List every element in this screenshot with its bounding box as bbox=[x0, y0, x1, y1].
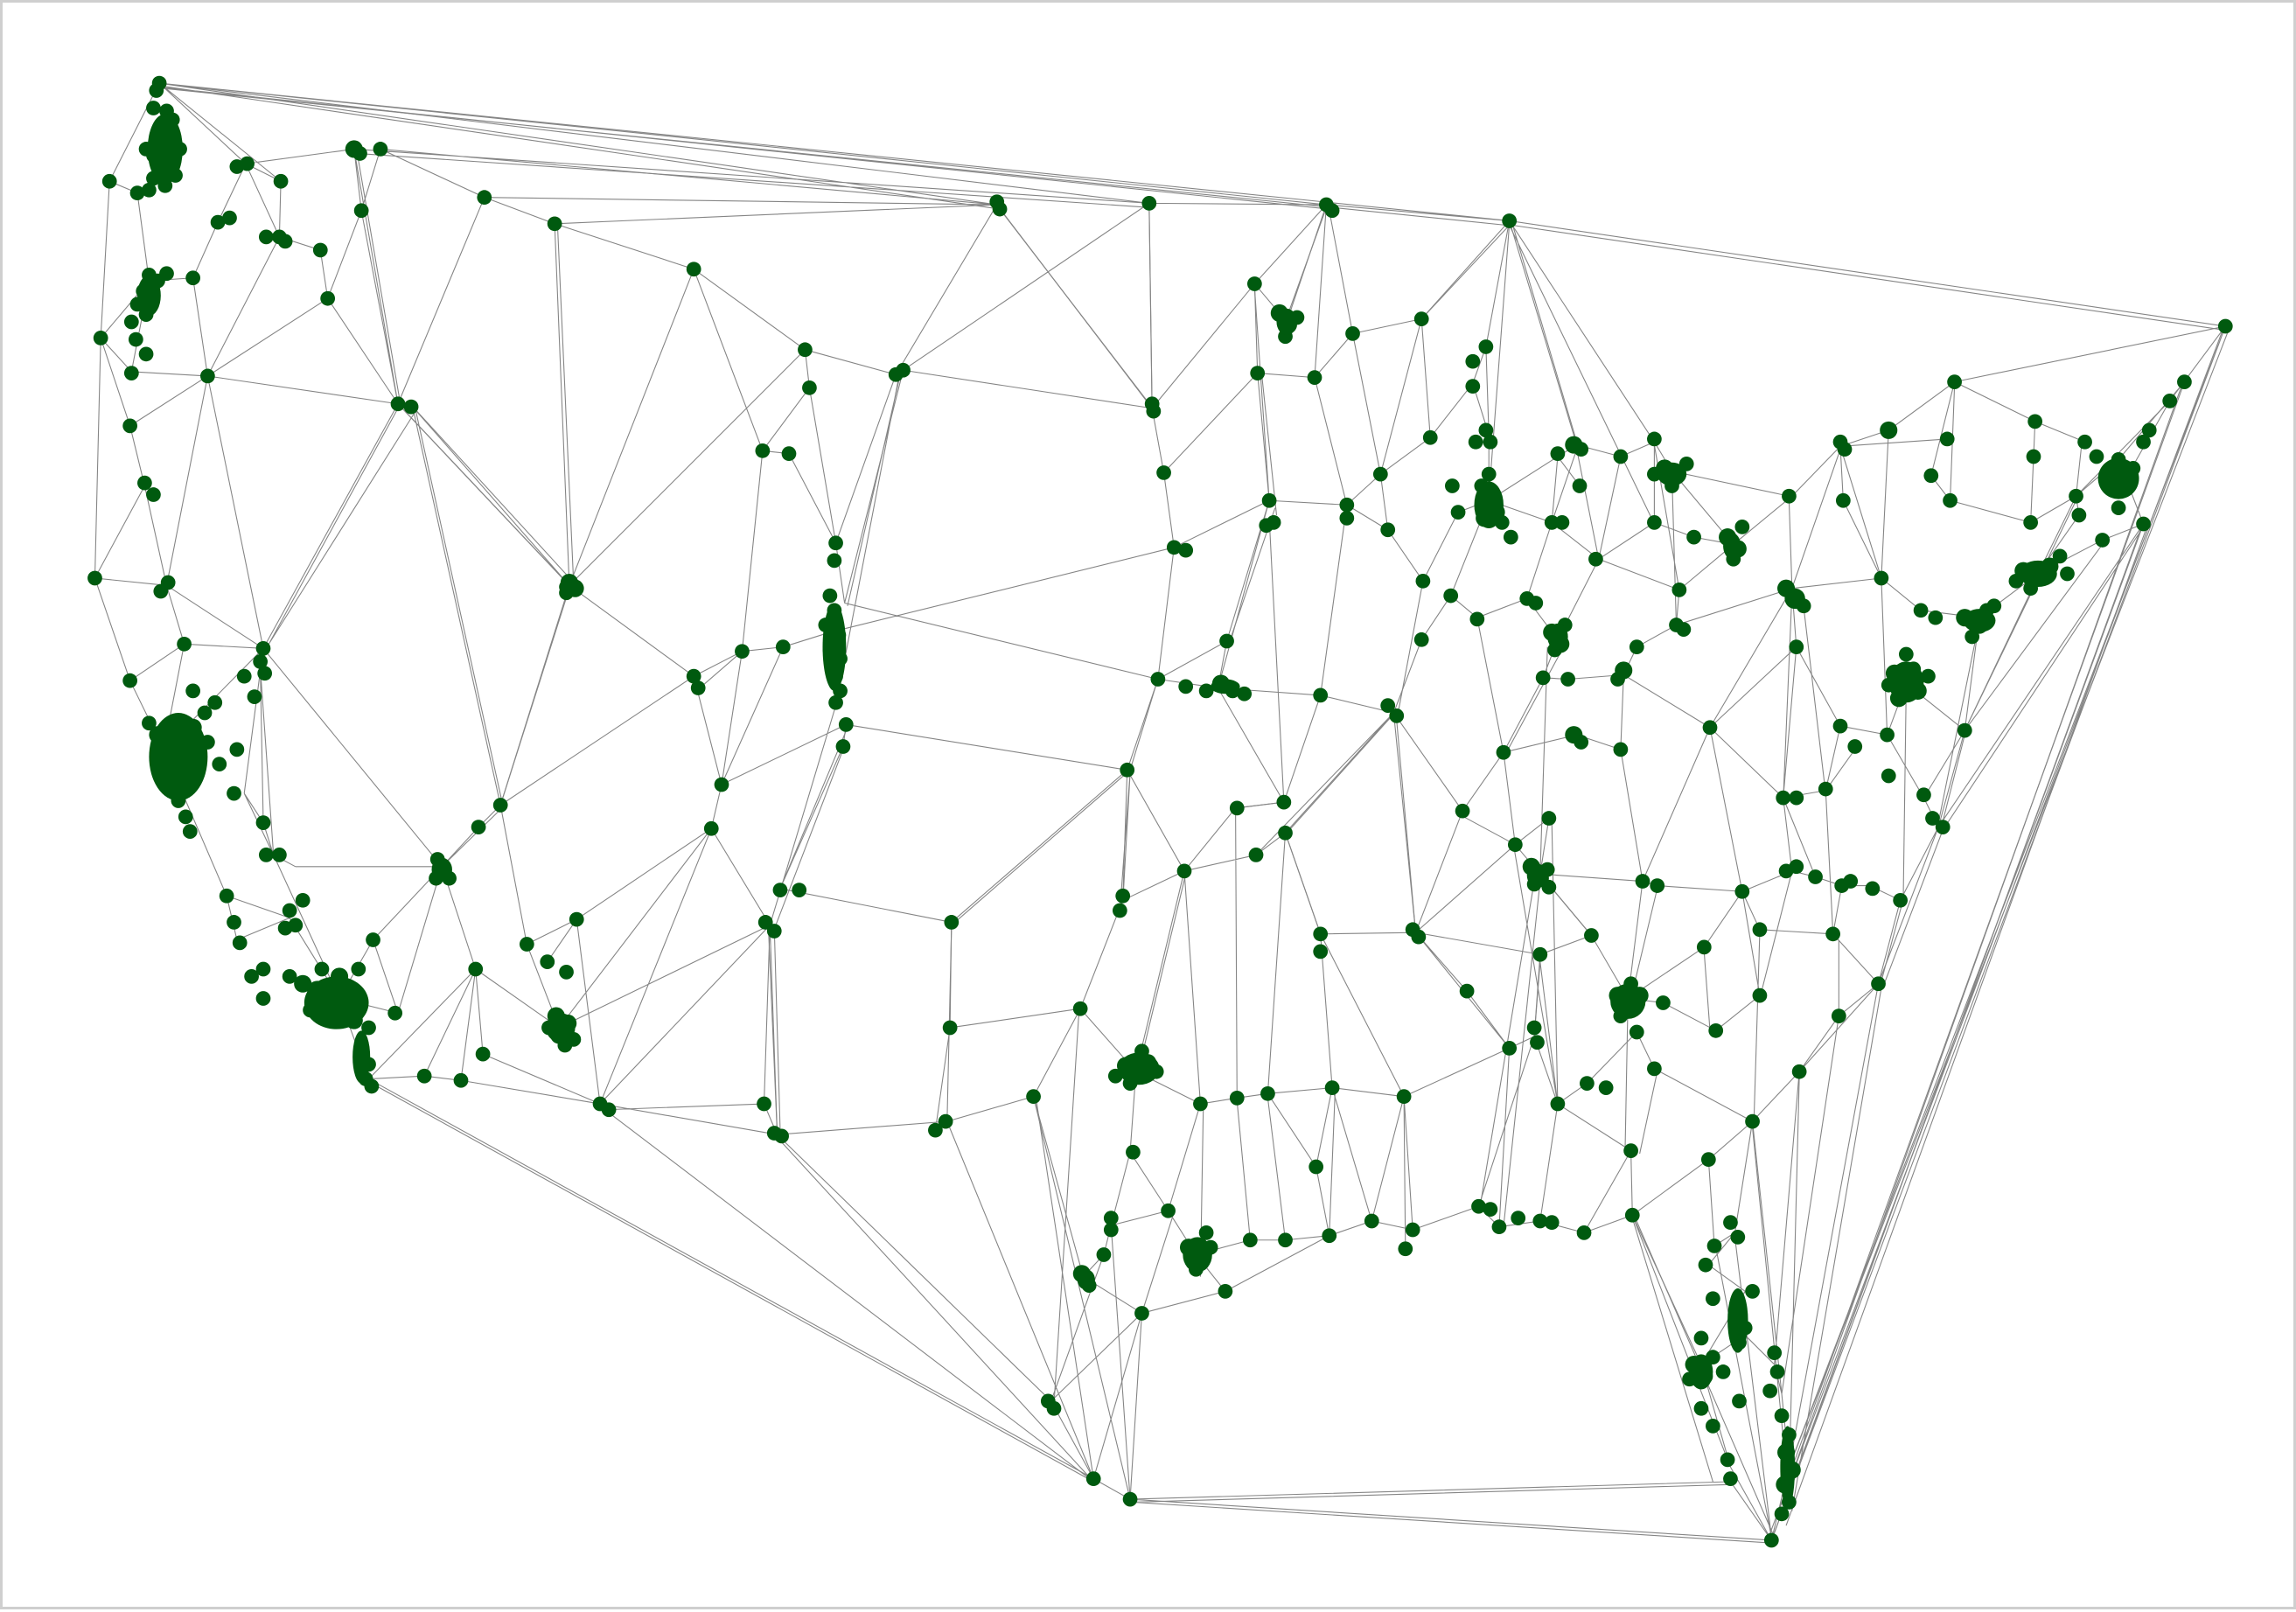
node clusters: dense metro blobs bbox=[137, 114, 2139, 1508]
